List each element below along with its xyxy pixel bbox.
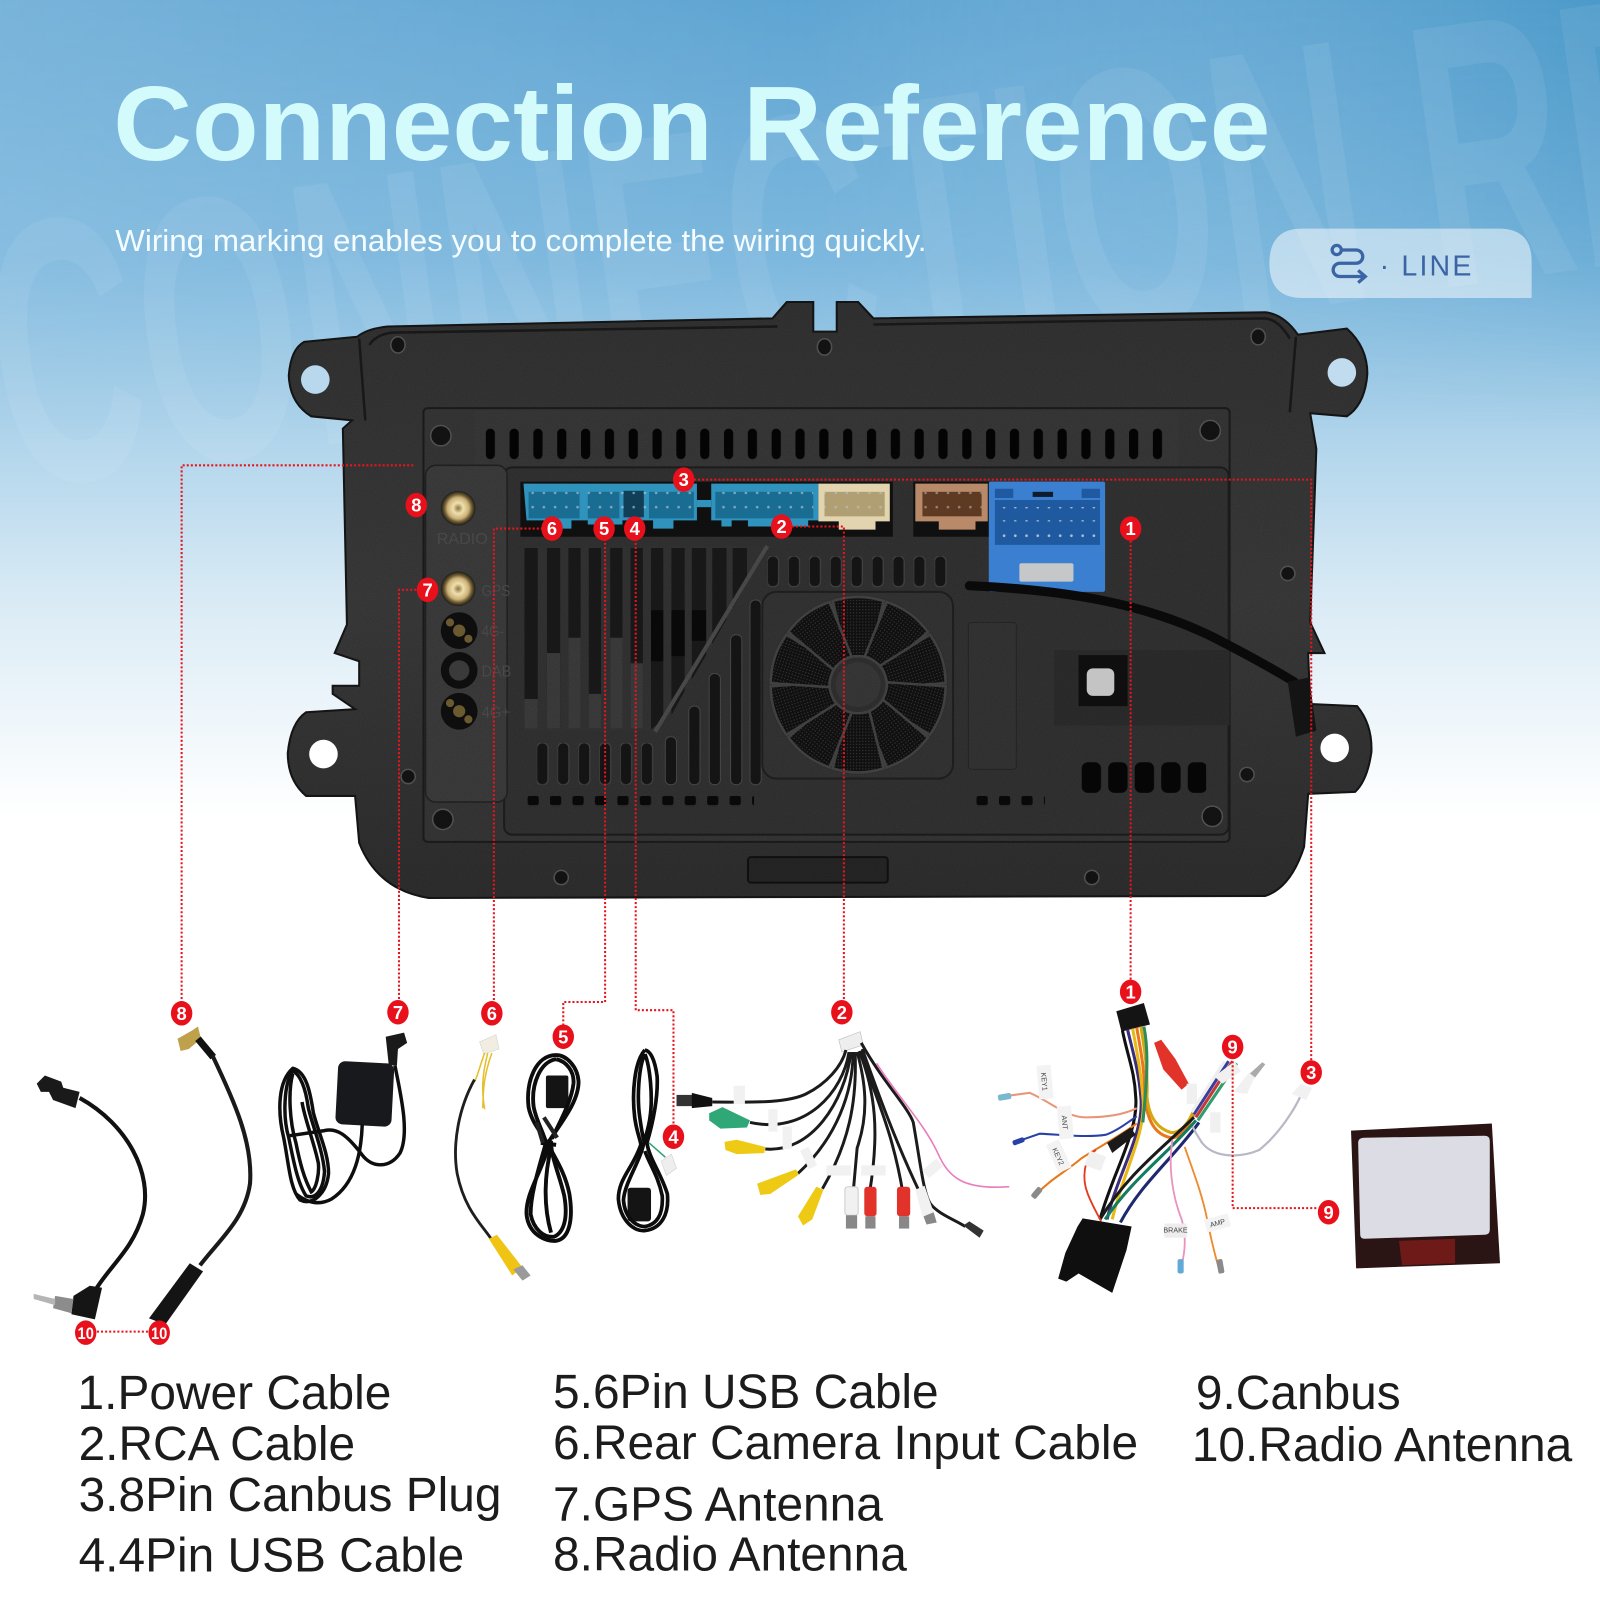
number badges: 9 — [1323, 1202, 1334, 1223]
cable: 6pin USB 5 — [526, 1055, 579, 1241]
number badges: 8 — [411, 495, 421, 516]
screws — [391, 329, 1295, 885]
tag KEY2: KEY2 — [1050, 1147, 1065, 1167]
top vent slots — [474, 410, 1179, 466]
bottom pills — [537, 743, 662, 785]
harness wires — [712, 1043, 965, 1227]
cable: rear camera input 6 — [456, 1035, 531, 1281]
number badges: 7 — [422, 579, 433, 600]
badge label: · LINE — [1380, 251, 1471, 283]
antenna labels: 4G+ — [482, 704, 510, 721]
gold antenna sockets — [441, 491, 476, 606]
tag ANT — [1057, 1106, 1074, 1139]
cable: GPS antenna 7 — [280, 1033, 407, 1203]
optical port background — [1054, 650, 1230, 726]
left vent slats — [524, 546, 767, 732]
legend column 3: 10.Radio Antenna — [1192, 1419, 1573, 1472]
cable: power harness 1 — [998, 1003, 1312, 1293]
GPS receiver module — [335, 1061, 394, 1127]
legend column 1: 3.8Pin Canbus Plug — [79, 1469, 501, 1522]
legend column 3: 9.Canbus — [1196, 1367, 1401, 1420]
harness top connector — [1116, 1003, 1150, 1032]
top right pills — [767, 556, 951, 588]
legend column 2: 6.Rear Camera Input Cable — [553, 1417, 1138, 1470]
head unit back panel — [286, 300, 1373, 900]
tag BRAKE: BRAKE — [1163, 1227, 1188, 1235]
fan grille — [762, 592, 953, 779]
legend column 1: 2.RCA Cable — [79, 1418, 355, 1471]
side recess — [968, 622, 1016, 769]
harness tags — [734, 1086, 943, 1178]
tag AMP — [1204, 1213, 1231, 1233]
number badges: 4 — [630, 518, 641, 539]
bay dark strip right — [913, 482, 990, 537]
number badges: 3 — [1306, 1062, 1316, 1083]
teal connectors — [523, 484, 818, 529]
harness tags — [1036, 1065, 1231, 1238]
antenna labels: RADIO — [437, 531, 488, 548]
recessed panel — [423, 408, 1230, 842]
surface grain — [286, 300, 1373, 900]
Canbus box 9 — [1351, 1123, 1500, 1268]
number badges: 6 — [547, 518, 557, 539]
legend column 2: 7.GPS Antenna — [553, 1478, 883, 1531]
legend column 3 — [1192, 1367, 1573, 1472]
tan connector — [818, 484, 890, 530]
main wire bundle — [1100, 1027, 1237, 1222]
background gradient — [0, 0, 1600, 816]
bottom right vents — [1082, 762, 1206, 793]
number badges: 9 — [1228, 1037, 1238, 1058]
legend column 2: 8.Radio Antenna — [553, 1528, 907, 1581]
number badges: 6 — [487, 1003, 497, 1024]
side wires — [999, 1093, 1137, 1117]
optical port — [1079, 655, 1128, 706]
number badges: 4 — [668, 1126, 679, 1147]
number badges: 2 — [777, 516, 787, 537]
bay dark strip — [520, 482, 893, 537]
harness bottom connector — [1058, 1218, 1132, 1293]
subtitle: Wiring marking enables you to complete the wiring quickly. — [115, 224, 927, 258]
harness plugs — [998, 1040, 1312, 1274]
antenna labels: DAB — [482, 664, 511, 681]
diagonal ridge — [655, 546, 767, 732]
number badges: 10 — [78, 1325, 94, 1343]
tag KEY1 — [1036, 1065, 1054, 1100]
legend column 2: 5.6Pin USB Cable — [553, 1366, 939, 1419]
legend column 1: 1.Power Cable — [78, 1367, 391, 1420]
antenna labels: GPS — [482, 583, 510, 600]
number badges: 1 — [1126, 518, 1136, 539]
bottom latch slot — [748, 857, 888, 883]
number badges: 8 — [177, 1003, 187, 1024]
rim edge — [359, 318, 1296, 420]
antenna labels: 4G- — [482, 624, 504, 641]
black antenna sockets — [441, 612, 478, 730]
tag KEY2 — [1046, 1139, 1072, 1173]
tag ANT: ANT — [1060, 1115, 1069, 1131]
legend column 1 — [78, 1367, 501, 1582]
icon: line route — [1332, 245, 1365, 283]
number badges: 3 — [679, 469, 689, 490]
number badges: 10 — [151, 1325, 167, 1343]
pink wire — [877, 1063, 1009, 1187]
title: Connection Reference — [113, 65, 1270, 183]
tag AMP: AMP — [1209, 1218, 1226, 1229]
connector dotted lines — [97, 465, 1318, 1332]
number badges: 7 — [393, 1002, 403, 1023]
number badges: 1 — [1126, 981, 1136, 1002]
bottom squares — [528, 796, 1045, 806]
connector bay — [504, 467, 1229, 835]
mounting holes — [301, 358, 1356, 768]
unit body — [288, 302, 1371, 898]
badge: line — [1269, 229, 1532, 298]
legend column 1: 4.4Pin USB Cable — [79, 1529, 464, 1582]
harness connector — [839, 1032, 863, 1052]
blue connector — [989, 482, 1105, 592]
tag KEY1: KEY1 — [1039, 1072, 1049, 1091]
brown connector — [915, 484, 988, 530]
diagonal pills — [665, 600, 761, 785]
antenna labels — [437, 531, 511, 721]
power cable — [969, 586, 1316, 737]
number badges: 2 — [837, 1002, 847, 1023]
cable: radio antenna 10 right — [149, 1027, 250, 1324]
cable: 4pin USB 4 — [618, 1050, 677, 1231]
antenna panel — [426, 465, 507, 802]
number badges: 5 — [599, 518, 609, 539]
number badges — [75, 467, 1339, 1345]
legend column 2 — [553, 1366, 1138, 1581]
cable: radio adapter 10 left — [34, 1076, 145, 1319]
tag BRAKE — [1163, 1223, 1188, 1238]
cable: RCA harness 2 — [677, 1032, 1009, 1238]
GPS plug — [386, 1033, 407, 1065]
RCA plugs — [677, 1093, 984, 1238]
number badges: 5 — [558, 1026, 568, 1047]
